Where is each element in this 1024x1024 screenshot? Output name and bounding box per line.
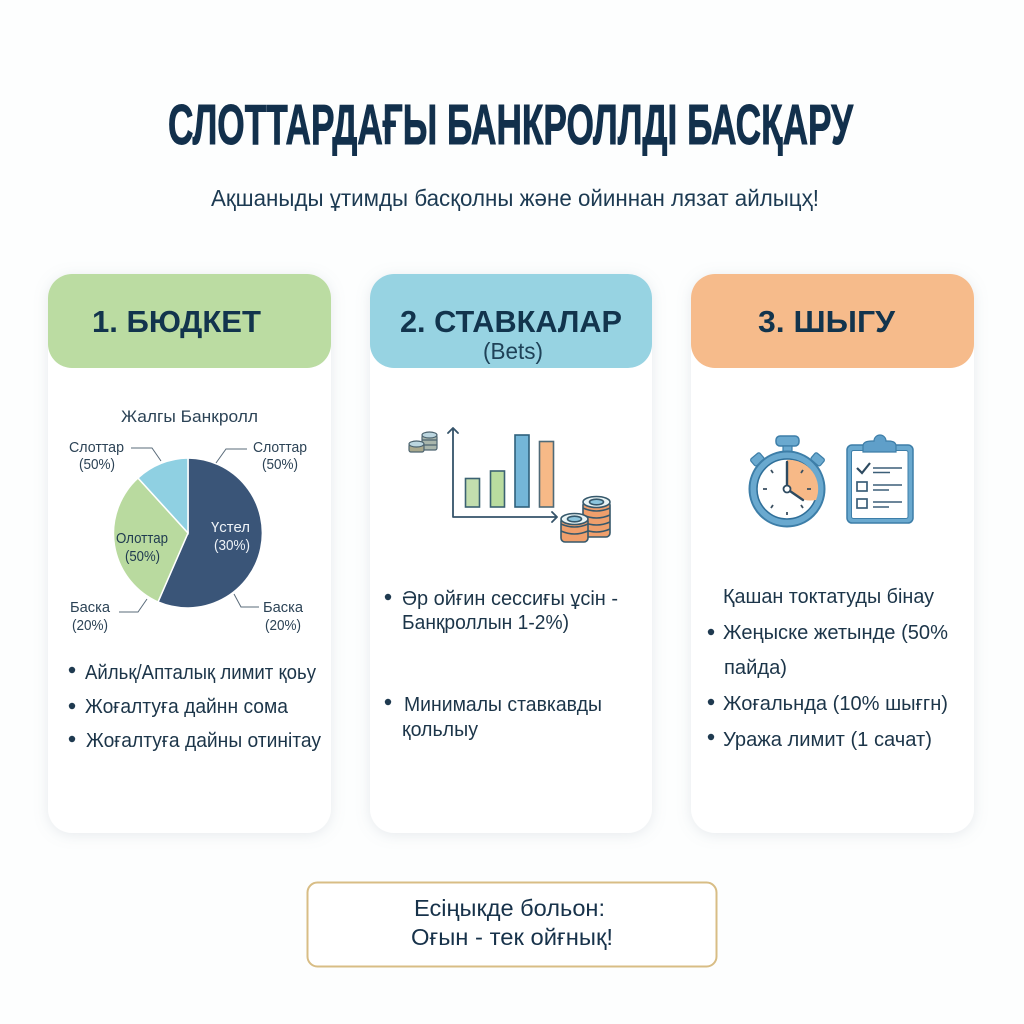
exit bullet list: Жеңыске жетынде (50% <box>723 622 948 644</box>
panel: budget <box>48 274 331 833</box>
pie callouts: Баска <box>263 599 304 616</box>
pie callouts: Слоттар <box>253 439 307 456</box>
subtitle: Ақшаныды ұтимды басқолны және ойиннан лязат айлыцҳ! <box>211 185 819 211</box>
panel header: bets <box>370 274 652 368</box>
pie chart <box>113 458 262 608</box>
exit subheading: Қашан токтатуды бінау <box>723 586 934 608</box>
icon: large coin stacks <box>561 496 610 542</box>
pie callouts: (20%) <box>72 617 108 634</box>
panel header: bets: 2. СТАВКАЛАР <box>400 304 622 339</box>
panel: bets <box>370 274 652 833</box>
icon: stopwatch <box>750 436 825 526</box>
bets bullet list: Банқроллын 1-2%) <box>402 612 569 634</box>
panel header: bets: (Bets) <box>483 338 543 364</box>
bets bullet list <box>385 588 618 741</box>
pie chart: Үстел <box>211 519 250 536</box>
callout <box>308 882 716 966</box>
pie chart: Олоттар <box>116 530 168 547</box>
pie callouts <box>69 439 307 634</box>
pie callouts: Слоттар <box>69 439 124 456</box>
pie chart: (50%) <box>125 548 160 565</box>
bets bullet list: Минималы ставкавды <box>404 694 602 716</box>
exit bullet list: Уража лимит (1 сачат) <box>723 729 932 751</box>
panel header: exit <box>691 274 974 368</box>
budget bullet list: Айльқ/Апталық лимит қоьу <box>85 662 316 684</box>
budget bullet list: Жоғалтуға дайнн сома <box>85 696 289 718</box>
bar chart <box>448 428 557 522</box>
bets bullet list: Әр ойғин сессиғы ұсін - <box>402 588 618 610</box>
panel header: budget <box>48 274 331 368</box>
budget bullet list: Жоғалтуға дайны отинітау <box>86 730 321 752</box>
bets bullet list: қольлыу <box>402 719 478 741</box>
pie callouts: (20%) <box>265 617 301 634</box>
exit bullet list: Жоғальнда (10% шығгн) <box>723 693 948 715</box>
icon: clipboard checklist <box>847 435 913 523</box>
exit bullet list: пайда) <box>724 657 787 679</box>
pie callouts: Баска <box>70 599 111 616</box>
pie callouts: (50%) <box>79 456 115 473</box>
callout: Оғын - тек ойғнық! <box>411 924 613 950</box>
exit bullet list <box>708 622 948 751</box>
panel header: exit: 3. ШЫГУ <box>758 304 896 339</box>
panel header: budget: 1. БЮДКЕТ <box>92 304 261 339</box>
callout: Есіңыкде больон: <box>414 895 605 921</box>
pie chart: (30%) <box>214 537 250 554</box>
icon: small coin stacks <box>409 432 437 452</box>
panel: exit <box>691 274 974 833</box>
budget bullet list <box>69 662 321 752</box>
pie callouts: (50%) <box>262 456 298 473</box>
chart title: Жалгы Банкролл <box>121 407 258 426</box>
